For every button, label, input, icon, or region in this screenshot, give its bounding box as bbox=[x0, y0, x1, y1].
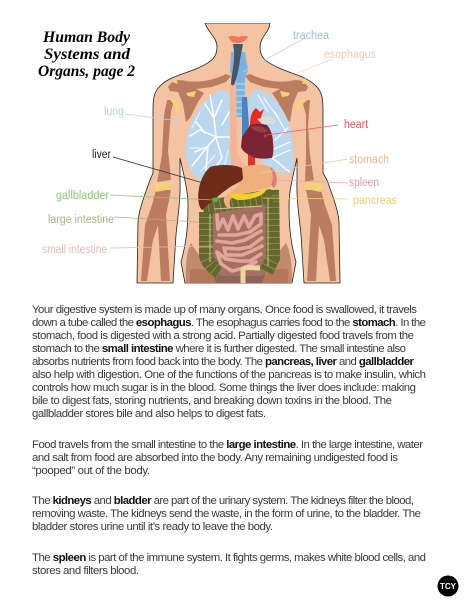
logo badge bbox=[438, 576, 458, 596]
white cover for top edge bbox=[200, 20, 275, 23]
spleen bbox=[270, 167, 277, 188]
gallbladder bbox=[212, 197, 219, 202]
label: spleen bbox=[277, 177, 379, 189]
label: liver bbox=[92, 149, 210, 185]
rectum bbox=[243, 268, 260, 283]
title bbox=[38, 29, 135, 80]
label: stomach: stomach bbox=[349, 154, 389, 166]
title: Organs, page 2 bbox=[38, 63, 135, 80]
label: spleen: spleen bbox=[349, 177, 379, 189]
paragraph: digestive system: also help with digestion. One of the functions of the pancreas is to make insulin, which bbox=[32, 369, 426, 381]
paragraph: digestive system bbox=[32, 304, 426, 420]
liver bbox=[198, 165, 245, 210]
logo badge: TCY bbox=[440, 582, 457, 591]
pelvis bbox=[186, 243, 292, 283]
large intestine bbox=[203, 190, 278, 276]
label: heart: heart bbox=[344, 119, 369, 131]
paragraph: spleen: stores and filters blood. bbox=[32, 565, 139, 577]
paragraph: large intestine bbox=[32, 439, 423, 477]
paragraph: digestive system: controls how much sugar is in the blood. Some things the liver does include: making bbox=[32, 382, 416, 394]
trachea bbox=[230, 52, 249, 140]
label: small intestine: small intestine bbox=[42, 244, 107, 256]
label: pancreas bbox=[263, 195, 397, 207]
label: gallbladder: gallbladder bbox=[56, 190, 109, 202]
stomach bbox=[224, 165, 275, 208]
title: Human Body bbox=[42, 29, 131, 46]
label: stomach bbox=[260, 154, 389, 173]
paragraph: large intestine: “pooped” out of the body. bbox=[32, 465, 150, 477]
paragraph: spleen bbox=[32, 552, 426, 577]
paragraph: digestive system: gallbladder stores bile and also helps to digest fats. bbox=[32, 408, 266, 420]
esophagus bbox=[230, 44, 249, 190]
joints yellow bbox=[155, 78, 322, 192]
paragraph: digestive system: Your digestive system is made up of many organs. Once food is swallowed, it travels bbox=[32, 304, 417, 316]
label: lung: lung bbox=[104, 106, 124, 118]
paragraph: urinary system: The kidneys and bladder are part of the urinary system. The kidneys filter the blood, bbox=[32, 495, 414, 507]
heart bbox=[241, 108, 276, 168]
label: esophagus: esophagus bbox=[324, 49, 376, 61]
small intestine bbox=[217, 214, 262, 271]
label: large intestine: large intestine bbox=[48, 214, 114, 226]
label: liver: liver bbox=[92, 149, 111, 161]
paragraph: digestive system: stomach to the small intestine where it is further digested. The small intestine also bbox=[32, 343, 406, 355]
lips bbox=[228, 36, 248, 43]
skin outline bbox=[137, 23, 340, 283]
right forearm bbox=[306, 190, 336, 281]
paragraph: digestive system: stomach, food is digested with a strong acid. Partially digested food travels from the bbox=[32, 330, 414, 342]
humerus right bbox=[302, 100, 314, 182]
paragraph: digestive system: absorbs nutrients from food back into the body. The pancreas, liver and gallbladder bbox=[32, 356, 415, 368]
body figure bbox=[137, 20, 340, 283]
leader lines and labels bbox=[42, 30, 397, 256]
label: pancreas: pancreas bbox=[353, 195, 397, 207]
paragraph: urinary system bbox=[32, 495, 421, 533]
lungs bbox=[186, 90, 293, 180]
paragraph: large intestine: and salt from food are absorbed into the body. Any remaining undigested food is bbox=[32, 452, 398, 464]
label: heart bbox=[267, 119, 369, 135]
label: large intestine bbox=[48, 214, 198, 226]
label: esophagus bbox=[297, 49, 376, 73]
label: gallbladder bbox=[56, 190, 213, 202]
paragraph: digestive system: bile to digest fats, storing nutrients, and breaking down toxins in the blood. The bbox=[32, 395, 392, 407]
skeleton: clavicles and shoulders bbox=[141, 74, 336, 281]
paragraph: digestive system: down a tube called the esophagus. The esophagus carries food to the stomach. In the bbox=[32, 317, 426, 329]
paragraph: urinary system: removing waste. The kidneys send the waste, in the form of urine, to the bladder. The bbox=[32, 508, 421, 520]
paragraph: large intestine: Food travels from the small intestine to the large intestine. In the large intestine, water bbox=[32, 439, 423, 451]
label: lung bbox=[104, 106, 187, 122]
humerus left bbox=[157, 100, 174, 182]
title: Systems and bbox=[44, 46, 131, 63]
pancreas bbox=[228, 188, 267, 200]
paragraph: spleen: The spleen is part of the immune system. It fights germs, makes white blood cells, and bbox=[32, 552, 426, 564]
left forearm bbox=[141, 190, 171, 281]
label: trachea: trachea bbox=[293, 30, 330, 42]
label: trachea bbox=[243, 30, 330, 72]
paragraph: urinary system: bladder stores urine until it’s ready to leave the body. bbox=[32, 521, 273, 533]
